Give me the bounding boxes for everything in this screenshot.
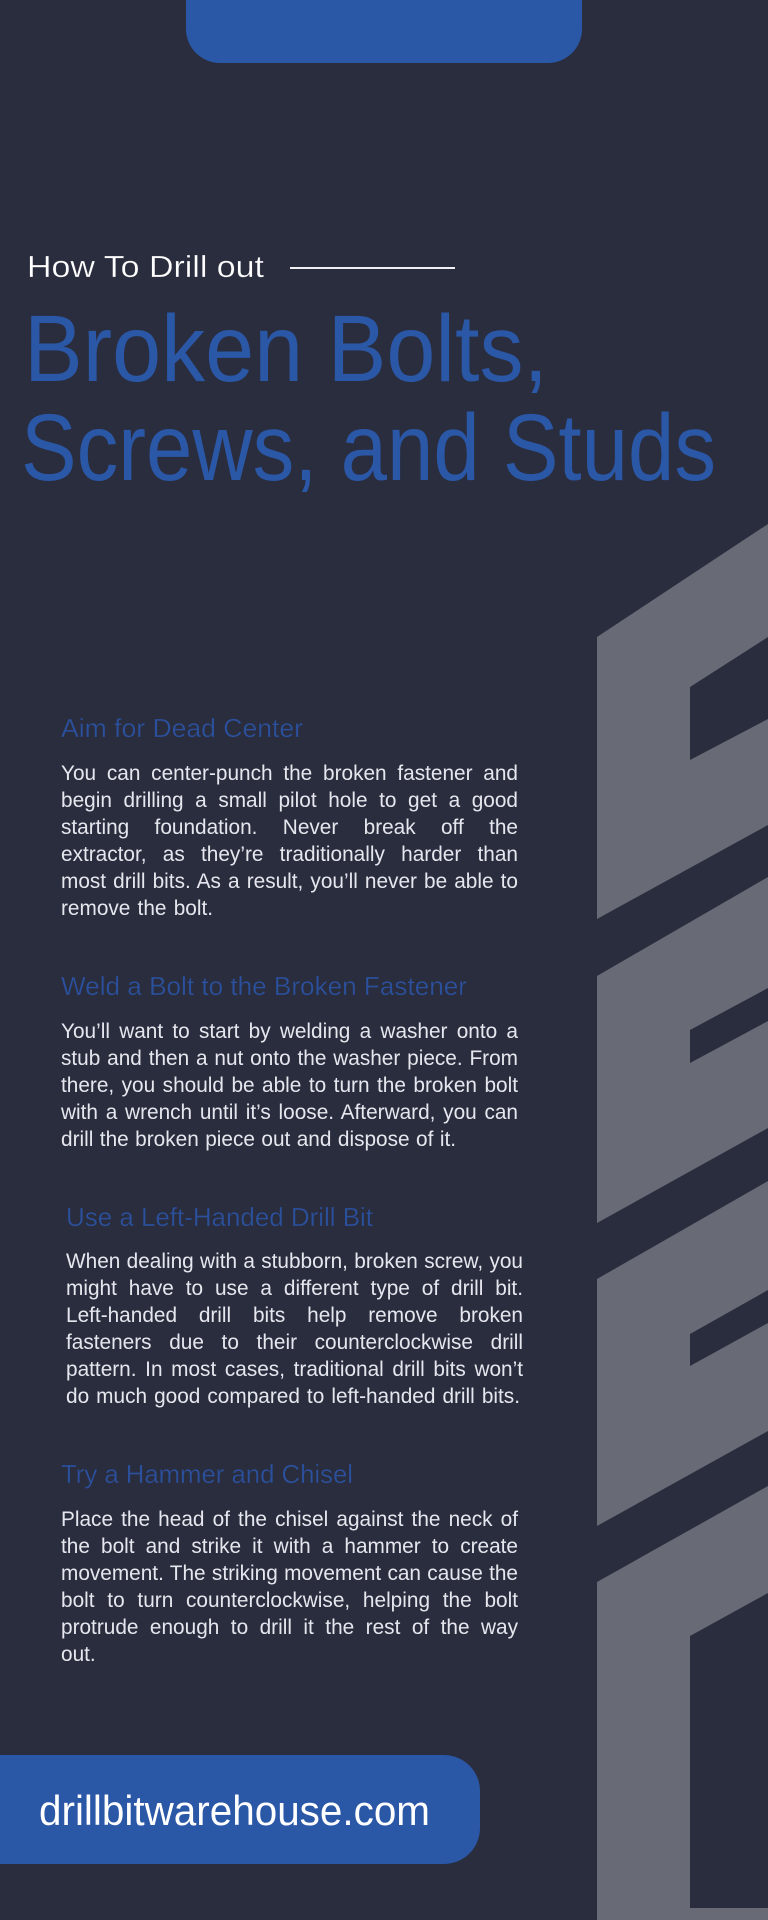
section: Use a Left-Handed Drill Bit [66, 1202, 523, 1408]
body text: You’ll want to start by welding a washer onto a [61, 1020, 518, 1043]
body text: When dealing with a stubborn, broken screw, you [66, 1250, 523, 1273]
top blue tab [186, 0, 582, 63]
body text: Place the head of the chisel against the neck of [61, 1508, 518, 1531]
body text [61, 1020, 518, 1151]
heading: Weld a Bolt to the Broken Fastener [61, 971, 467, 1001]
body text: movement. The striking movement can cause the [61, 1562, 518, 1585]
body text [61, 762, 518, 920]
body text: there, you should be able to turn the broken bolt [61, 1074, 518, 1097]
body text: Left-handed drill bits help remove broken [66, 1304, 523, 1327]
body text: with a wrench until it’s loose. Afterward, you can [61, 1101, 518, 1124]
body text: drill the broken piece out and dispose of it. [61, 1128, 456, 1151]
heading: Try a Hammer and Chisel [61, 1459, 353, 1489]
section: Weld a Bolt to the Broken Fastener [61, 971, 518, 1151]
body text: begin drilling a small pilot hole to get a good [61, 789, 518, 812]
website url: drillbitwarehouse.com [39, 1787, 430, 1834]
subtitle rule [290, 267, 455, 269]
body text: extractor, as they’re traditionally harder than [61, 843, 518, 866]
body text: remove the bolt. [61, 897, 213, 920]
main title line 1: Broken Bolts, [24, 296, 548, 402]
body text: might have to use a different type of drill bit. [66, 1277, 523, 1300]
subtitle: How To Drill out [27, 249, 264, 284]
section: Try a Hammer and Chisel [61, 1459, 518, 1666]
body text: out. [61, 1643, 96, 1666]
heading: Use a Left-Handed Drill Bit [66, 1202, 374, 1232]
body text: starting foundation. Never break off the [61, 816, 518, 839]
body text [66, 1250, 523, 1408]
body text: do much good compared to left-handed drill bits. [66, 1385, 520, 1408]
title block [21, 249, 716, 501]
body text [61, 1508, 518, 1666]
body text: protrude enough to drill it the rest of the way [61, 1616, 518, 1639]
footer pill with website [0, 1755, 480, 1864]
body text: bolt to turn counterclockwise, helping the bolt [61, 1589, 518, 1612]
body text: fasteners due to their counterclockwise drill [66, 1331, 523, 1354]
body text: You can center-punch the broken fastener and [61, 762, 518, 785]
body text: most drill bits. As a result, you’ll never be able to [61, 870, 518, 893]
heading: Aim for Dead Center [61, 713, 303, 743]
body text: stub and then a nut onto the washer piece. From [61, 1047, 518, 1070]
body text: the bolt and strike it with a hammer to create [61, 1535, 518, 1558]
section: Aim for Dead Center [61, 713, 518, 920]
body text: pattern. In most cases, traditional drill bits won’t [66, 1358, 523, 1381]
